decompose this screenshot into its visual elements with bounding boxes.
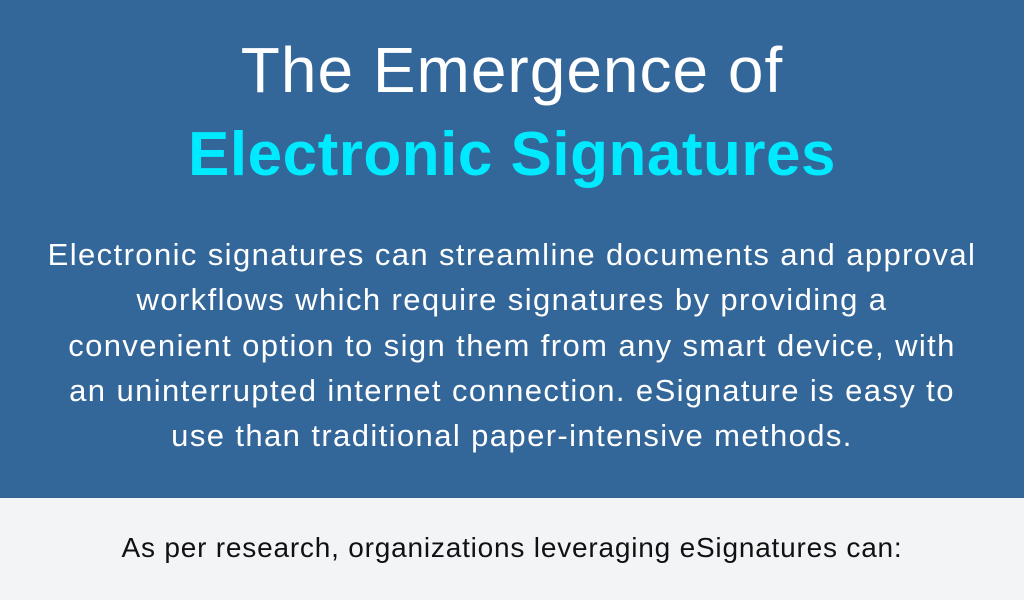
- intro paragraph: workflows which require signatures by providing a: [137, 282, 887, 317]
- intro paragraph: Electronic signatures can streamline documents and approval: [48, 237, 976, 272]
- intro paragraph: an uninterrupted internet connection. eSignature is easy to: [69, 373, 955, 408]
- panel: research intro: [0, 498, 1024, 600]
- intro paragraph: [48, 237, 976, 453]
- intro paragraph: convenient option to sign them from any smart device, with: [68, 328, 956, 363]
- research statement: As per research, organizations leveraging eSignatures can:: [121, 532, 903, 563]
- title line 2: Electronic Signatures: [188, 120, 836, 189]
- title line 1: The Emergence of: [241, 34, 783, 106]
- intro paragraph: use than traditional paper-intensive methods.: [171, 418, 853, 453]
